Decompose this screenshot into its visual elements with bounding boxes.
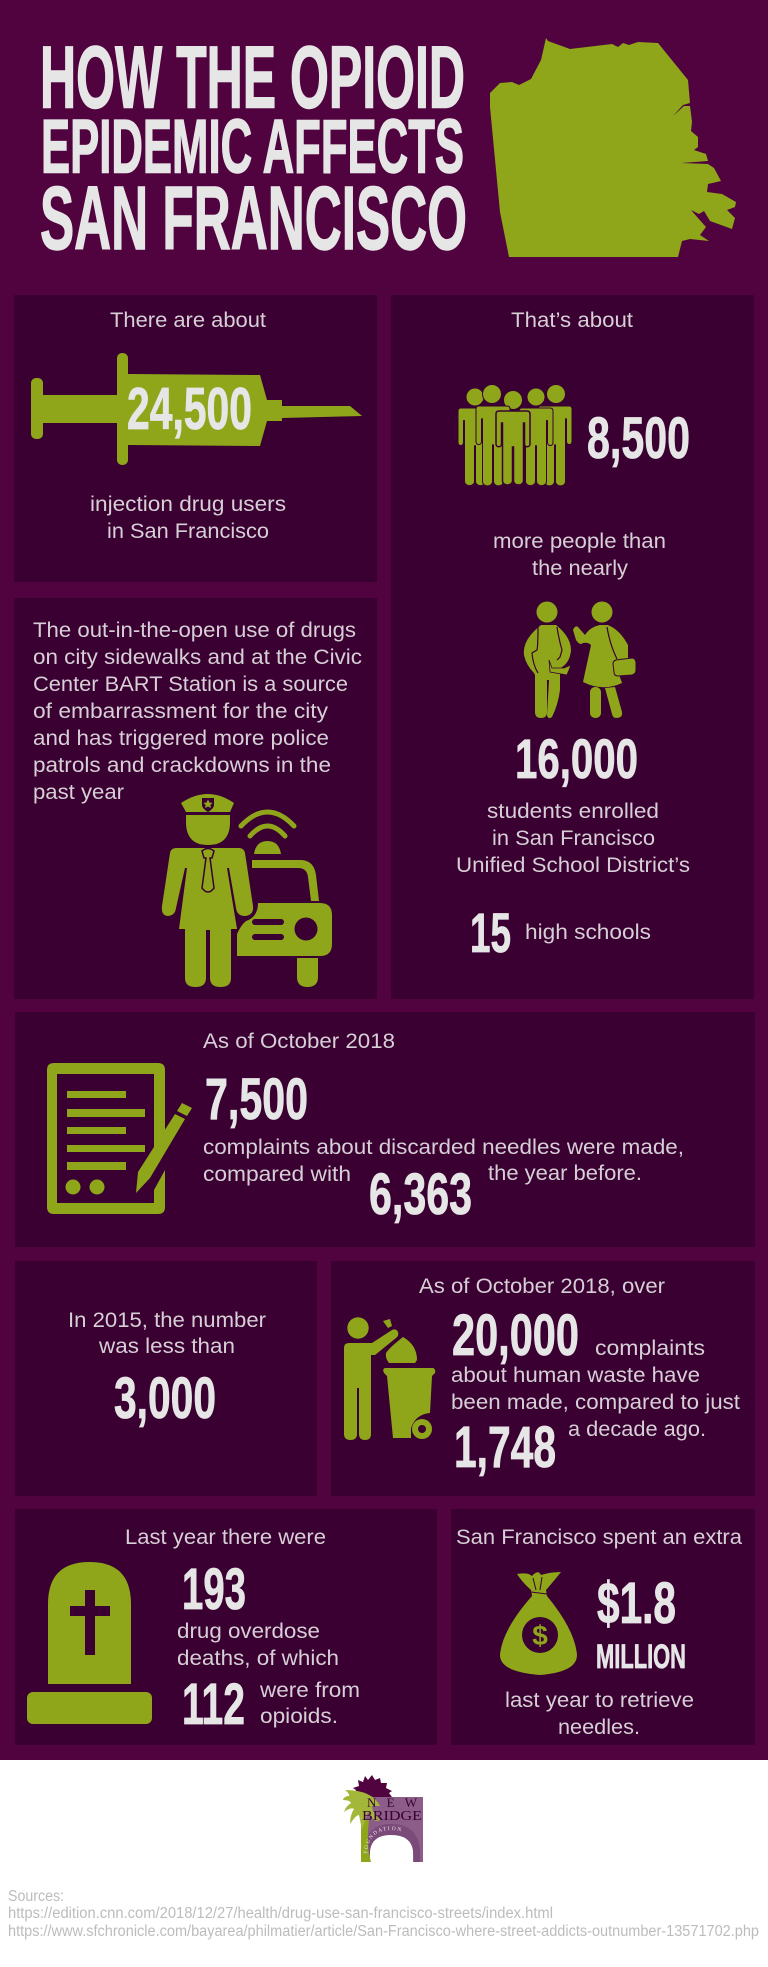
intro text: That’s about xyxy=(511,309,633,332)
stat: 20,000: 20,000 xyxy=(452,1303,579,1368)
stat: 8,500: 8,500 xyxy=(587,406,690,471)
body text: the year before. xyxy=(488,1162,642,1185)
icon: syringe xyxy=(31,353,362,465)
stat: 1,748: 1,748 xyxy=(454,1415,556,1480)
body text: on city sidewalks and at the Civic xyxy=(33,646,362,669)
body text: been made, compared to just xyxy=(451,1391,740,1414)
body text xyxy=(177,1620,339,1670)
body text: The out-in-the-open use of drugs xyxy=(33,619,356,642)
heading: San Francisco spent an extra xyxy=(456,1526,742,1549)
stat: 112: 112 xyxy=(182,1672,245,1737)
stat: 15 high schools xyxy=(470,901,651,964)
opioids text: were from xyxy=(259,1679,360,1702)
icon: person with trash bin xyxy=(344,1317,435,1440)
icon: group of people xyxy=(458,384,572,486)
students text: students enrolled xyxy=(487,800,659,823)
panel: overdose deaths xyxy=(15,1509,437,1745)
panel: public drug use and police xyxy=(14,598,377,999)
panel: needle retrieval cost xyxy=(451,1509,755,1745)
stat: 16,000: 16,000 xyxy=(515,727,638,790)
panel: needle complaints xyxy=(15,1012,755,1247)
icon: students xyxy=(524,602,636,718)
stat: 15 high schools: high schools xyxy=(525,921,651,944)
heading: As of October 2018, over xyxy=(419,1275,665,1298)
caption: injection drug users xyxy=(90,493,286,516)
body text: compared with xyxy=(203,1163,351,1186)
stat: 15 high schools: 15 xyxy=(470,901,511,964)
stat: 193: 193 xyxy=(182,1557,246,1622)
icon: police officer and car xyxy=(162,794,332,987)
stat: 6,363: 6,363 xyxy=(369,1162,472,1227)
body text: last year to retrieve xyxy=(505,1689,694,1712)
body text: complaints xyxy=(595,1337,705,1360)
body text: needles. xyxy=(558,1716,640,1739)
stat: 24,500: 24,500 xyxy=(127,376,252,442)
title: EPIDEMIC AFFECTS xyxy=(41,104,464,190)
panel: 2015 number xyxy=(15,1261,317,1496)
body text xyxy=(505,1689,694,1739)
body text: about human waste have xyxy=(451,1364,700,1387)
opioids text xyxy=(259,1679,360,1728)
comparison text xyxy=(493,530,666,580)
comparison text: more people than xyxy=(493,530,666,553)
title: HOW THE OPIOID xyxy=(40,28,465,126)
body text xyxy=(33,619,362,804)
body text: drug overdose xyxy=(177,1620,320,1643)
comparison text: the nearly xyxy=(532,557,629,580)
icon: money bag xyxy=(500,1572,577,1675)
title xyxy=(40,28,467,269)
students text: in San Francisco xyxy=(492,827,655,850)
body text: In 2015, the number xyxy=(68,1309,266,1332)
icon: tombstone xyxy=(27,1562,152,1724)
stat: 3,000: 3,000 xyxy=(114,1366,216,1431)
caption: in San Francisco xyxy=(107,520,269,543)
icon: document and pencil xyxy=(47,1063,192,1214)
body text xyxy=(451,1337,740,1441)
body text: Center BART Station is a source xyxy=(33,673,348,696)
title: SAN FRANCISCO xyxy=(40,169,467,269)
body text: and has triggered more police xyxy=(33,727,329,750)
body text: of embarrassment for the city xyxy=(33,700,329,723)
stat: $1.8: $1.8 xyxy=(597,1571,676,1636)
body text: was less than xyxy=(98,1335,235,1358)
sources xyxy=(8,1888,759,1940)
opioids text: opioids. xyxy=(260,1705,338,1728)
body text xyxy=(68,1309,266,1358)
body text: patrols and crackdowns in the xyxy=(33,754,331,777)
logo: New Bridge Foundation: BRIDGE xyxy=(362,1809,422,1824)
panel: human waste complaints xyxy=(331,1261,755,1496)
icon: San Francisco map xyxy=(490,38,736,257)
stat: 7,500: 7,500 xyxy=(205,1067,308,1132)
sources: Sources: xyxy=(8,1888,64,1905)
body text: deaths, of which xyxy=(177,1647,339,1670)
panel: more people than students xyxy=(391,295,754,999)
logo: New Bridge Foundation: NEW xyxy=(367,1795,418,1810)
students text xyxy=(456,800,690,877)
panel: injection drug users xyxy=(14,295,377,582)
students text: Unified School District’s xyxy=(456,854,690,877)
heading: As of October 2018 xyxy=(203,1030,395,1053)
body text: complaints about discarded needles were made, xyxy=(203,1136,684,1159)
icon: money bag: $ xyxy=(532,1620,548,1651)
logo: New Bridge Foundation: F O U N D A T I O N xyxy=(364,1826,402,1854)
body text xyxy=(203,1136,684,1186)
sources: https://edition.cnn.com/2018/12/27/health/drug-use-san-francisco-streets/index.html xyxy=(8,1905,553,1922)
body text: past year xyxy=(33,781,124,804)
stat: MILLION: MILLION xyxy=(596,1638,686,1676)
logo: New Bridge Foundation xyxy=(343,1775,423,1862)
heading: Last year there were xyxy=(125,1526,326,1549)
body text: a decade ago. xyxy=(568,1418,706,1441)
intro text: There are about xyxy=(110,309,266,332)
caption xyxy=(90,493,286,543)
